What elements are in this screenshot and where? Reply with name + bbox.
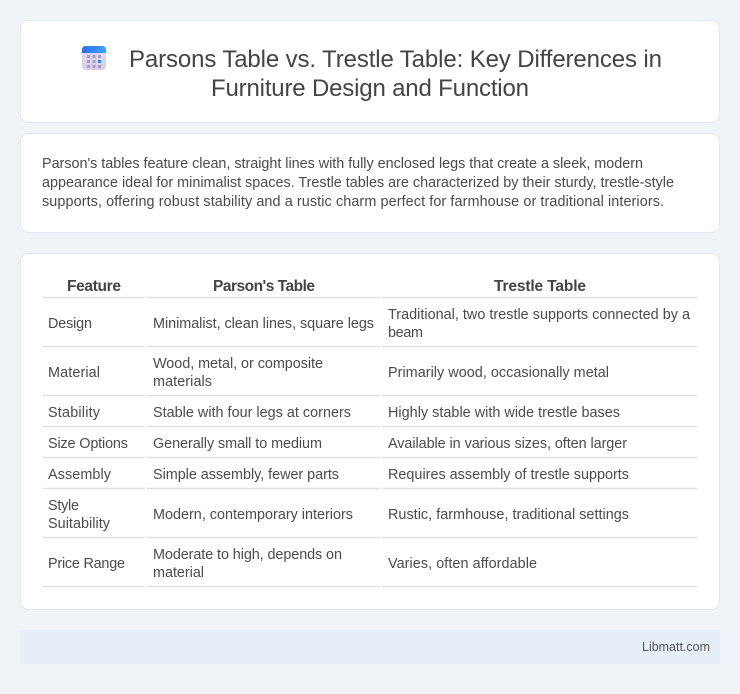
row: assembly: Simple assembly, fewer parts: [153, 467, 339, 483]
row: size options: [43, 436, 697, 458]
row: style suitability: Style: [48, 498, 79, 514]
row: stability: [43, 405, 697, 426]
footer: [20, 630, 720, 664]
title: [129, 46, 662, 102]
row: stability: Highly stable with wide trestle bases: [388, 405, 620, 421]
table header row: [43, 278, 697, 298]
table header row: Feature: [67, 278, 121, 295]
row: material: materials: [153, 374, 212, 390]
icon: calendar: [82, 46, 106, 70]
text block: summary: [42, 156, 674, 210]
row: size options: Generally small to medium: [153, 436, 322, 452]
footer: Libmatt.com: [642, 640, 710, 654]
row: stability: Stability: [48, 405, 101, 421]
row: design: Traditional, two trestle supports connected by a: [388, 307, 690, 323]
panel: introduction: [20, 134, 720, 232]
row: assembly: [43, 467, 697, 488]
panel: comparison table: [20, 254, 720, 610]
title: Furniture Design and Function: [211, 75, 529, 102]
row: price range: Price Range: [48, 556, 125, 572]
row: style suitability: [43, 498, 697, 538]
row: stability: Stable with four legs at corners: [153, 405, 351, 421]
panel: header: [20, 20, 720, 122]
table header row: Parson's Table: [213, 278, 315, 295]
text block: summary: appearance ideal for minimalist spaces. Trestle tables are characterized by their sturdy, trestle-style: [42, 175, 674, 191]
row: assembly: Requires assembly of trestle supports: [388, 467, 629, 483]
row: design: Design: [48, 316, 92, 332]
row: price range: Moderate to high, depends on: [153, 547, 342, 563]
title: Parsons Table vs. Trestle Table: Key Differences in: [129, 46, 662, 73]
row: design: [43, 307, 697, 346]
row: design: beam: [388, 325, 423, 341]
text block: summary: Parson's tables feature clean, straight lines with fully enclosed legs that create a sleek, modern: [42, 156, 643, 172]
row: assembly: Assembly: [48, 467, 112, 483]
row: material: [43, 356, 697, 396]
row: material: Wood, metal, or composite: [153, 356, 323, 372]
row: style suitability: Rustic, farmhouse, traditional settings: [388, 507, 629, 523]
text block: summary: supports, offering robust stability and a rustic charm perfect for farmhouse or traditional interiors.: [42, 194, 664, 210]
row: material: Material: [48, 365, 100, 381]
row: price range: material: [153, 565, 204, 581]
table header row: Trestle Table: [494, 278, 586, 295]
row: style suitability: Modern, contemporary interiors: [153, 507, 353, 523]
row: price range: Varies, often affordable: [388, 556, 537, 572]
row: size options: Available in various sizes, often larger: [388, 436, 627, 452]
row: size options: Size Options: [48, 436, 128, 452]
row: material: Primarily wood, occasionally metal: [388, 365, 609, 381]
row: design: Minimalist, clean lines, square legs: [153, 316, 374, 332]
row: price range: [43, 547, 697, 586]
row: style suitability: Suitability: [48, 516, 111, 532]
